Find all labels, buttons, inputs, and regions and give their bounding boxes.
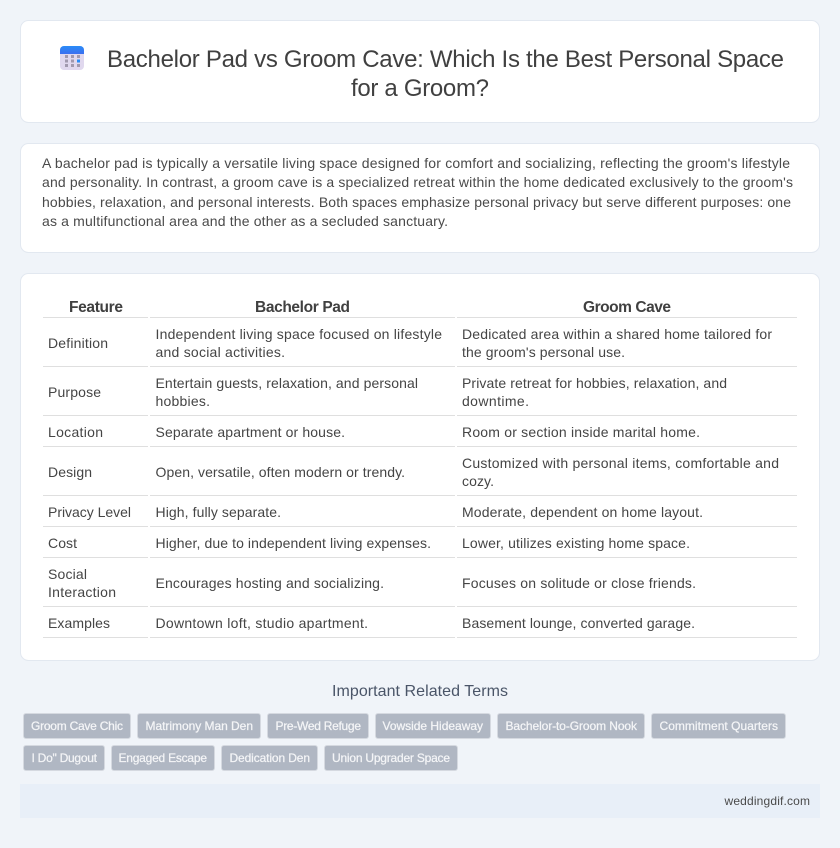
row: privacy level [48, 504, 703, 520]
row: location: Location [48, 424, 103, 440]
tags: related terms: I Do" Dugout [32, 751, 98, 765]
row: examples: Basement lounge, converted garage. [462, 615, 695, 631]
text block: introduction: hobbies, relaxation, and personal interests. Both spaces emphasize personal privacy but serve different purposes: one [42, 194, 791, 210]
footer [20, 784, 820, 818]
row: privacy level: Privacy Level [48, 504, 131, 520]
row: design: cozy. [462, 473, 494, 489]
table header row: Bachelor Pad [255, 299, 350, 316]
tags: related terms: Union Upgrader Space [332, 751, 450, 765]
panel: introduction [20, 144, 820, 252]
row: location: Room or section inside marital home. [462, 424, 700, 440]
row: cost: Cost [48, 535, 77, 551]
title [107, 46, 784, 102]
row: cost: Lower, utilizes existing home space. [462, 535, 690, 551]
row: purpose: hobbies. [156, 393, 210, 409]
row: design: Design [48, 464, 92, 480]
row: location [48, 424, 700, 440]
row: purpose: Purpose [48, 384, 101, 400]
tags: related terms: Groom Cave Chic [31, 719, 123, 733]
text block: introduction: A bachelor pad is typically a versatile living space designed for comfort and socializing, reflecting the groom's lifestyle [42, 155, 790, 171]
tags: related terms: Engaged Escape [118, 751, 207, 765]
row: cost [48, 535, 690, 551]
row: definition: and social activities. [156, 344, 285, 360]
text block: introduction [42, 155, 793, 229]
row: purpose: Entertain guests, relaxation, and personal [156, 375, 418, 391]
table header row [69, 299, 671, 316]
row: definition: Definition [48, 335, 108, 351]
row: social interaction: Interaction [48, 584, 116, 600]
tags: related terms: Commitment Quarters [660, 719, 778, 733]
table header row: Feature [69, 299, 123, 316]
row: design: Open, versatile, often modern or trendy. [156, 464, 405, 480]
tags: related terms: Dedication Den [230, 751, 310, 765]
row: cost: Higher, due to independent living expenses. [156, 535, 431, 551]
text block: introduction: and personality. In contrast, a groom cave is a specialized retreat within the home dedicated exclusively to the groom's [42, 174, 793, 190]
tags: related terms: Pre-Wed Refuge [276, 719, 361, 733]
tags: related terms: Matrimony Man Den [146, 719, 253, 733]
row: design [48, 455, 779, 489]
row: purpose [48, 375, 727, 409]
footer: weddingdif.com [724, 794, 810, 808]
title: for a Groom? [351, 75, 489, 102]
text block: introduction: as a multifunctional area and the other as a secluded sanctuary. [42, 213, 448, 229]
row: purpose: downtime. [462, 393, 529, 409]
row: privacy level: Moderate, dependent on home layout. [462, 504, 703, 520]
heading: important related terms: Important Related Terms [332, 683, 508, 700]
row: examples: Downtown loft, studio apartment. [156, 615, 368, 631]
panel: comparison table [20, 274, 820, 660]
row: social interaction: Focuses on solitude or close friends. [462, 575, 696, 591]
row: definition: Dedicated area within a shared home tailored for [462, 326, 772, 342]
row: examples: Examples [48, 615, 110, 631]
row: social interaction: Encourages hosting and socializing. [156, 575, 384, 591]
row: definition [48, 326, 772, 360]
row: social interaction: Social [48, 566, 87, 582]
row: social interaction [48, 566, 696, 600]
table header row: Groom Cave [583, 299, 671, 316]
row: privacy level: High, fully separate. [156, 504, 281, 520]
title: Bachelor Pad vs Groom Cave: Which Is the Best Personal Space [107, 46, 784, 73]
icon: calendar [60, 46, 84, 70]
panel: header [20, 20, 820, 122]
row: location: Separate apartment or house. [156, 424, 345, 440]
tags: related terms: Vowside Hideaway [382, 719, 483, 733]
tags: related terms [24, 714, 786, 770]
row: purpose: Private retreat for hobbies, relaxation, and [462, 375, 727, 391]
row: definition: the groom's personal use. [462, 344, 625, 360]
row: design: Customized with personal items, comfortable and [462, 455, 779, 471]
tags: related terms: Bachelor-to-Groom Nook [506, 719, 638, 733]
row: definition: Independent living space focused on lifestyle [156, 326, 442, 342]
row: examples [48, 615, 695, 631]
